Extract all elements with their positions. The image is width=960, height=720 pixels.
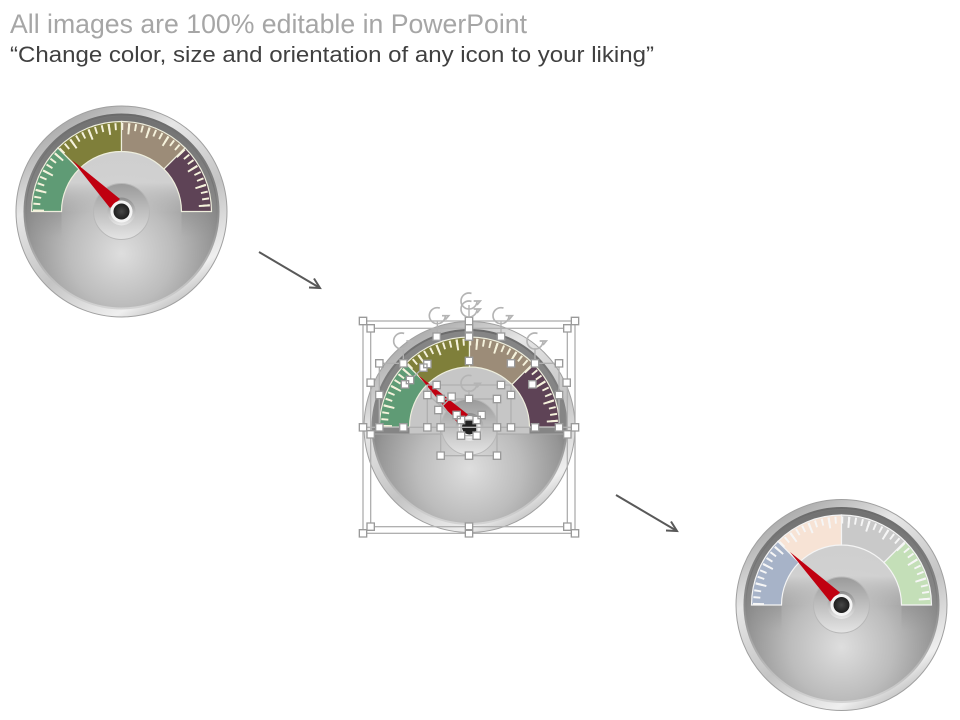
gauge segments (752, 515, 932, 605)
hub (94, 184, 150, 240)
needle cap (110, 200, 132, 222)
hub (814, 577, 870, 633)
subtitle: “Change color, size and orientation of any icon to your liking” (10, 42, 654, 67)
title: All images are 100% editable in PowerPoint (10, 9, 527, 39)
tick marks (756, 520, 926, 605)
arrow: first to second (259, 252, 320, 288)
needle (790, 552, 840, 602)
needle cap (830, 594, 852, 616)
gauge segments (32, 122, 212, 212)
selection frames (363, 305, 575, 533)
selection handles (359, 293, 579, 537)
rotation handles (394, 293, 546, 391)
arrow: second to third (616, 495, 677, 531)
gauge: recoloured light palette (736, 500, 947, 710)
gauge: original dark palette (16, 106, 227, 317)
gauge body (364, 322, 575, 532)
tick marks (36, 126, 206, 212)
needle (72, 160, 120, 208)
gauge: selected in editor (359, 293, 579, 537)
